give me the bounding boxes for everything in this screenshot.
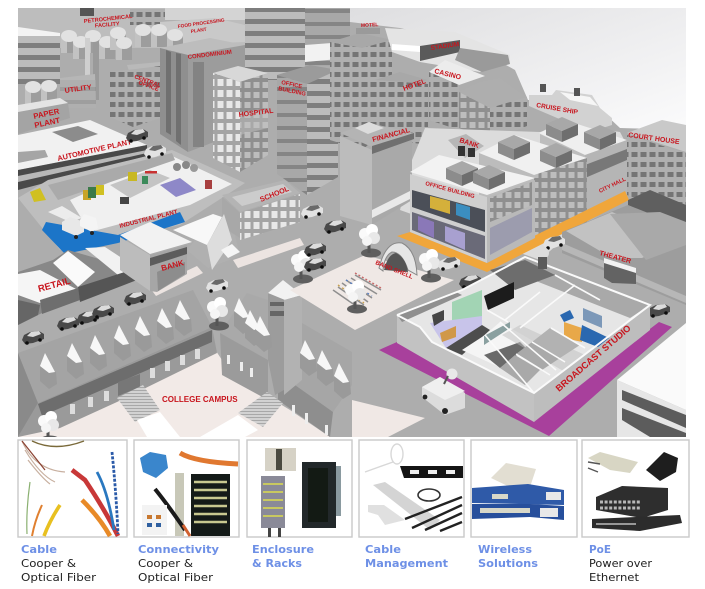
label: cruise ship: CRUISE SHIP (536, 102, 579, 116)
panel: cable management (359, 440, 464, 570)
label: office building: OFFICE BUILDING (424, 181, 476, 200)
office tower (277, 65, 338, 195)
storage tanks (61, 24, 183, 100)
photo: racks (247, 440, 352, 537)
financial building (340, 122, 414, 225)
heading: cable: Cable (365, 544, 401, 556)
heading: and racks: & Racks (252, 558, 302, 570)
casino (429, 65, 485, 127)
label: office building: OFFICE (281, 80, 303, 90)
label: stadium: STADIUM (430, 41, 460, 52)
condominium (160, 38, 245, 152)
label: bank: BANK (458, 137, 480, 150)
panel: enclosure and racks (247, 440, 352, 570)
label: theater: THEATER (598, 250, 632, 265)
label: restaurant: RESTAURANT (548, 212, 594, 238)
tall tower (330, 22, 392, 150)
label: school: SCHOOL (258, 184, 291, 204)
heading: connectivity: Connectivity (138, 544, 219, 556)
retail strip (18, 247, 137, 325)
label: industrial plant: INDUSTRIAL PLANT (119, 209, 179, 230)
theater (562, 205, 686, 305)
entry stairs right (200, 392, 283, 437)
heading: cable: Cable (21, 544, 57, 556)
label: plant: PLANT (34, 116, 61, 130)
waterfront (345, 8, 686, 130)
parking structure lower right (617, 323, 686, 437)
downtown street patch (400, 125, 640, 260)
church (173, 214, 240, 270)
back tower (245, 8, 305, 80)
hotel (384, 74, 428, 144)
entry stairs left (117, 385, 180, 437)
label: motel: MOTEL (361, 22, 379, 29)
building base left wing (18, 290, 217, 437)
court house (627, 120, 686, 218)
label: automotive plant: AUTOMOTIVE PLANT (56, 137, 133, 163)
label: building: BUILDING (278, 86, 307, 98)
photo: wireless equipment (471, 440, 577, 537)
industrial plant (18, 150, 245, 250)
label: central office: CENTRAL (133, 74, 162, 90)
paper plant (18, 80, 70, 134)
satellite dish (537, 247, 549, 269)
cars (22, 129, 670, 345)
loading trucks (48, 206, 98, 239)
label: food processing plant: FOOD PROCESSING (177, 17, 225, 30)
photo: cable ties (359, 440, 464, 537)
label: city hall: CITY HALL (598, 176, 628, 195)
panel: city map illustration (18, 8, 686, 444)
band shell plaza (290, 243, 454, 330)
label: college campus: COLLEGE CAMPUS (162, 395, 238, 404)
text: ethernet: Ethernet (589, 572, 639, 584)
news van (422, 368, 465, 415)
trees (38, 224, 441, 444)
hospital (213, 66, 275, 172)
label: paper: PAPER (33, 107, 60, 121)
photo: cables (18, 440, 127, 537)
school (222, 180, 300, 240)
heading: enclosure: Enclosure (252, 544, 314, 556)
label: bank: BANK (160, 258, 185, 273)
campus plaza (18, 345, 330, 437)
petrochemical facility and background blocks (18, 8, 350, 66)
label: plant: PLANT (190, 27, 207, 35)
blue floor (42, 212, 185, 254)
label: condominium: CONDOMINIUM (188, 50, 232, 61)
bank small (448, 134, 484, 158)
heading: management: Management (365, 558, 448, 570)
gabled building (459, 92, 527, 130)
label: band shell: BAND SHELL (374, 259, 414, 281)
label: casino: CASINO (434, 68, 462, 82)
label: court house: COURT HOUSE (628, 132, 680, 146)
text: cooper: Cooper & (21, 558, 76, 570)
text: power over: Power over (589, 558, 653, 570)
heading: wireless: Wireless (478, 544, 532, 556)
stadium (385, 28, 510, 72)
panel: wireless solutions (471, 440, 577, 570)
photo: connectivity (134, 440, 239, 537)
panel: cable (18, 440, 127, 584)
text: cooper: Cooper & (138, 558, 193, 570)
dormers left wing (40, 300, 192, 389)
automotive plant (18, 120, 147, 190)
pale lot near van (352, 400, 425, 437)
gothic facade (628, 190, 686, 228)
photo: poe devices (582, 440, 689, 537)
label: hospital: HOSPITAL (238, 108, 275, 119)
office building (410, 155, 535, 263)
bank (120, 222, 192, 292)
broadcast studio (397, 257, 650, 422)
sidewalks (150, 238, 304, 296)
label: retail: RETAIL (37, 275, 72, 294)
ground and roads (18, 8, 686, 437)
restaurant block (479, 135, 594, 245)
heading: poe: PoE (589, 544, 611, 556)
label: hotel: HOTEL (402, 78, 428, 93)
cruise ship (529, 84, 612, 132)
right wing of campus (220, 280, 352, 437)
label: financial: FINANCIAL (371, 125, 412, 144)
label: facility: FACILITY (95, 21, 120, 29)
central office (110, 62, 162, 127)
orange floor (397, 191, 629, 272)
label: office: OFFICE (137, 80, 159, 93)
panel: power over ethernet (582, 440, 689, 584)
label: petrochemical facility: PETROCHEMICAL (84, 14, 133, 25)
striped block top left (18, 27, 60, 84)
label: utility: UTILITY (64, 82, 92, 95)
purple floor (379, 322, 672, 436)
text: optical fiber: Optical Fiber (21, 572, 97, 584)
label: broadcast studio: BROADCAST STUDIO (554, 323, 633, 394)
text: optical fiber: Optical Fiber (138, 572, 214, 584)
utility building (60, 74, 96, 104)
heading: solutions: Solutions (478, 558, 538, 570)
panel: connectivity (134, 440, 239, 584)
city hall block (539, 117, 628, 240)
